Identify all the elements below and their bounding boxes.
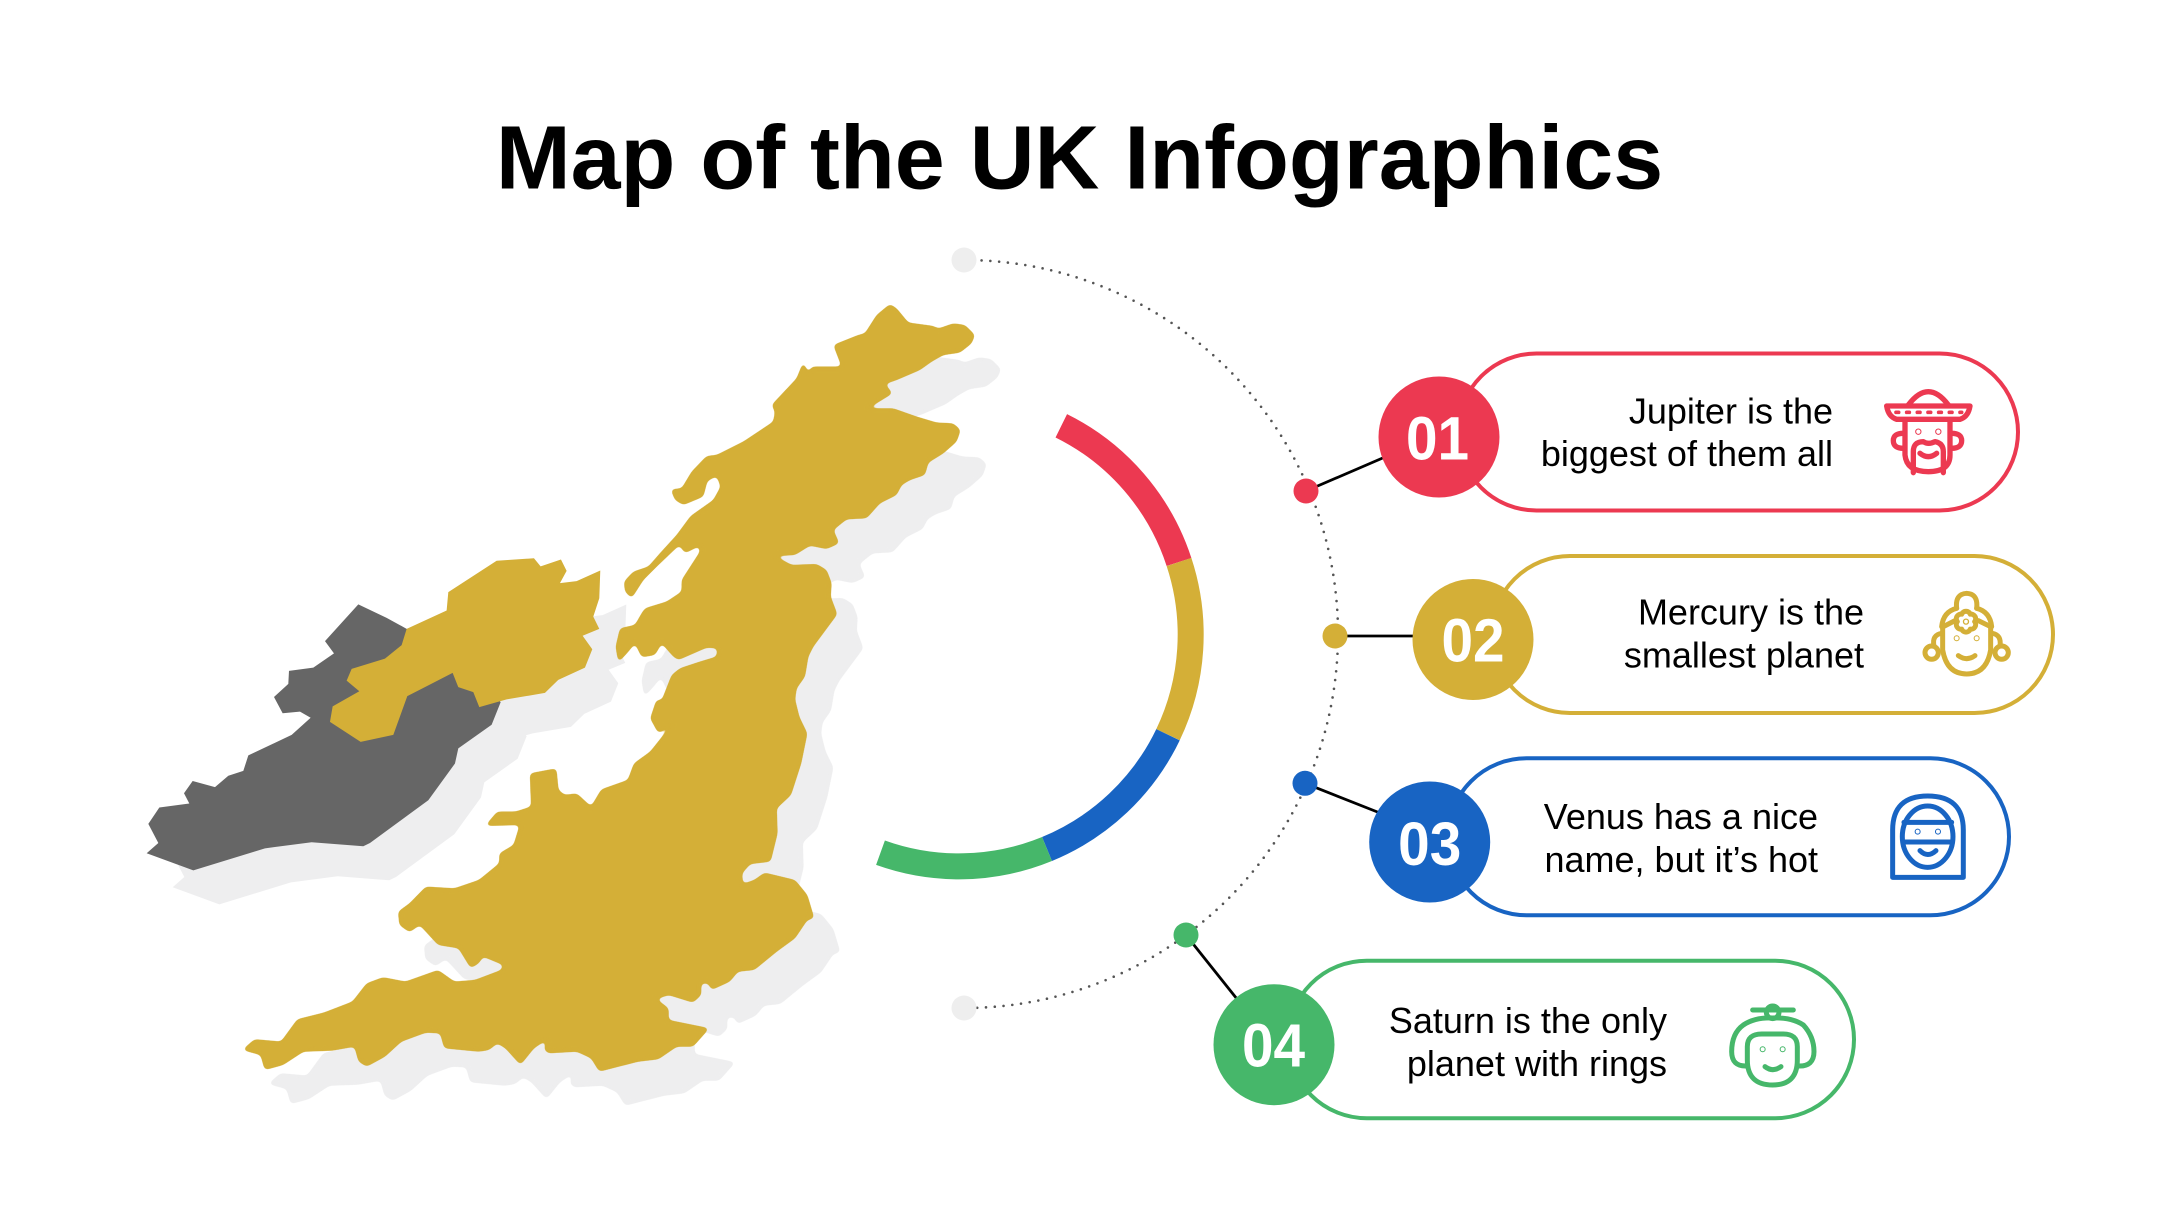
item 01: biggest of them all bbox=[1541, 433, 1833, 474]
item 03: name, but it’s hot bbox=[1544, 839, 1818, 880]
item 02: Mercury is the bbox=[1638, 592, 1864, 632]
item 02: smallest planet bbox=[1624, 634, 1864, 676]
item 03: Venus has a nice bbox=[1544, 796, 1818, 837]
item 01: 01 bbox=[1406, 406, 1469, 473]
item 02: 02 bbox=[1441, 608, 1505, 675]
map: Northern Ireland bbox=[330, 558, 600, 742]
segmented ring bbox=[880, 426, 1191, 866]
item 04: Saturn is the only bbox=[1389, 1000, 1667, 1041]
dotted arc bbox=[964, 260, 1338, 1008]
title: Map of the UK Infographics bbox=[496, 108, 1663, 208]
arc end dot bottom bbox=[952, 996, 976, 1020]
item 03 bbox=[1292, 758, 2009, 915]
item 02 bbox=[1322, 556, 2053, 713]
icon: girl with flower bbox=[1925, 593, 2008, 674]
arc end dot top bbox=[952, 248, 976, 272]
icon: child with hair bun bbox=[1732, 1006, 1814, 1085]
item 01: Jupiter is the bbox=[1629, 390, 1833, 431]
map: Ireland bbox=[147, 604, 501, 870]
item 03: 03 bbox=[1398, 811, 1461, 878]
item 04 bbox=[1174, 922, 1854, 1118]
item 04: 04 bbox=[1242, 1013, 1305, 1080]
icon: person with headscarf bbox=[1893, 796, 1963, 877]
map: Great Britain bbox=[242, 304, 975, 1072]
map shadow bbox=[173, 338, 1001, 1106]
icon: man with hat bbox=[1887, 392, 1970, 473]
item 04: planet with rings bbox=[1407, 1043, 1667, 1084]
item 01 bbox=[1294, 354, 2018, 510]
